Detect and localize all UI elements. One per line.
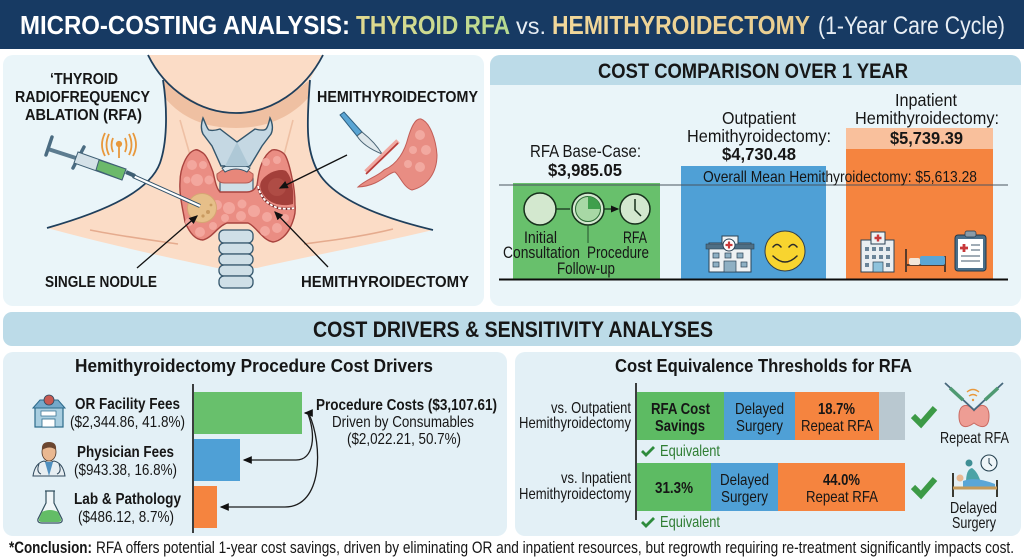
icon: smiley (765, 231, 805, 271)
panel title: Hemithyroidectomy Procedure Cost Drivers (75, 355, 433, 376)
title banner: MICRO-COSTING ANALYSIS: (20, 10, 350, 40)
RFA care pathway: Consultation (503, 244, 580, 262)
label: delayed surgery (950, 500, 997, 532)
stacked bar: outpatient: Surgery (736, 418, 783, 435)
label: thyroid RFA: RADIOFREQUENCY (15, 89, 150, 106)
icon: delayed surgery (953, 455, 997, 497)
chin shadow and neck outline (47, 55, 433, 244)
callout: procedure costs (316, 397, 497, 448)
bar: lab (194, 486, 217, 528)
bar: physician (194, 439, 240, 481)
row label: outpatient (519, 400, 631, 432)
icon: flask (38, 491, 62, 523)
arrow: to resection margin (275, 212, 328, 267)
label: thyroid RFA (15, 71, 150, 124)
label: physician fees (74, 444, 177, 479)
label: delayed surgery: Surgery (952, 515, 996, 532)
label: thyroid RFA: ABLATION (RFA) (25, 107, 142, 124)
RFA care pathway: Initial (524, 229, 557, 247)
icon: radio signal (102, 133, 136, 158)
label: RFA cost (530, 141, 641, 180)
thyroid cartilage (202, 118, 272, 194)
stacked bar: inpatient: 31.3% (655, 480, 693, 497)
stacked bar: outpatient: RFA Cost (651, 401, 711, 418)
neck and chest skin (47, 55, 433, 268)
title banner: THYROID RFA (356, 10, 510, 40)
label: thyroid RFA: ‘THYROID (50, 71, 118, 88)
label: OR facility fees (70, 396, 185, 431)
label: RFA cost: RFA Base-Case: (530, 141, 641, 161)
icon: physician (33, 442, 65, 476)
arrow: to nodule (137, 216, 197, 268)
icon: RFA needle syringe (46, 137, 200, 206)
stacked bar: inpatient: Delayed (720, 472, 769, 489)
label: outpatient cost: Hemithyroidectomy: (687, 126, 831, 146)
label: delayed surgery: Delayed (950, 500, 997, 517)
label: inpatient cost: Inpatient (895, 90, 957, 110)
label: physician fees: ($943.38, 16.8%) (74, 462, 177, 479)
stacked bar: outpatient: Delayed (735, 401, 784, 418)
equivalent flag: inpatient: Equivalent (660, 514, 720, 531)
label: RFA cost: $3,985.05 (548, 160, 622, 180)
icon: scalpel (340, 112, 398, 174)
callout: procedure costs: ($2,022.21, 50.7%) (347, 431, 461, 448)
icon: hospital inpatient (861, 232, 894, 272)
label: OR facility fees: ($2,344.86, 41.8%) (70, 414, 185, 431)
bar: RFA base-case (513, 183, 660, 279)
label: inpatient cost: $5,739.39 (890, 128, 963, 148)
baseline axis (499, 278, 1008, 280)
label: physician fees: Physician Fees (77, 444, 174, 461)
title banner (0, 0, 1024, 49)
title banner: vs. (516, 13, 546, 39)
title banner: HEMITHYROIDECTOMY (552, 10, 810, 40)
label: inpatient cost (855, 90, 999, 148)
icon: hospital bed (906, 249, 945, 272)
removed thyroid lobe (358, 119, 437, 190)
label: lab and pathology: Lab & Pathology (74, 491, 181, 508)
stacked bar: outpatient: Savings (655, 418, 705, 435)
bar: OR facility (194, 392, 302, 434)
panel: cost equivalence thresholds (515, 352, 1021, 536)
stacked bar: inpatient: 44.0% (823, 472, 860, 489)
row label: inpatient: vs. Inpatient (561, 470, 631, 487)
label: lab and pathology: ($486.12, 8.7%) (78, 509, 174, 526)
bar: outpatient (681, 166, 826, 279)
section heading: cost drivers: COST DRIVERS & SENSITIVITY ANALYSES (313, 317, 713, 342)
label: outpatient cost (687, 108, 831, 164)
label: lab and pathology (74, 491, 181, 526)
icon: clipboard (955, 231, 986, 271)
label: single nodule: SINGLE NODULE (45, 274, 157, 291)
section heading: cost drivers (3, 312, 1021, 346)
panel: anatomy illustration (3, 55, 484, 306)
equivalent flag: outpatient: Equivalent (660, 443, 720, 460)
label: inpatient cost: Hemithyroidectomy: (855, 108, 999, 128)
callout: procedure costs: Driven by Consumables (332, 414, 474, 431)
row label: inpatient: Hemithyroidectomy (519, 486, 631, 503)
RFA care pathway (503, 193, 650, 278)
callout: procedure costs: Procedure Costs ($3,107.61) (316, 397, 497, 414)
check mark: inpatient (913, 479, 935, 495)
label: hemithyroidectomy bottom: HEMITHYROIDECTOMY (301, 274, 469, 291)
row label: inpatient (519, 470, 631, 503)
panel heading (490, 55, 1021, 85)
thyroid gland (180, 150, 295, 242)
RFA care pathway: RFA (623, 229, 647, 247)
conclusion text: *Conclusion: (9, 539, 92, 557)
icon: OR building (33, 395, 65, 427)
resected lobe lesion (258, 170, 294, 209)
panel: procedure cost drivers (3, 352, 507, 536)
icon: repeat RFA (945, 383, 1003, 427)
bar: inpatient (846, 128, 993, 279)
arrow: to lesion (280, 155, 347, 188)
stacked bar: inpatient: Surgery (721, 489, 768, 506)
stacked bar: outpatient: Repeat RFA (801, 418, 873, 435)
panel title: Cost Equivalence Thresholds for RFA (615, 355, 912, 376)
mean reference line: Overall Mean Hemithyroidectomy: $5,613.28 (703, 169, 977, 186)
label: outpatient cost: Outpatient (722, 108, 796, 128)
lower trachea (219, 230, 253, 288)
row label: outpatient: vs. Outpatient (551, 400, 631, 417)
row label: outpatient: Hemithyroidectomy (519, 415, 631, 432)
RFA care pathway: Follow-up (557, 260, 615, 278)
stacked bar: outpatient (637, 392, 905, 440)
RFA care pathway: Procedure (587, 244, 649, 262)
label: outpatient cost: $4,730.48 (722, 144, 796, 164)
icon: hospital outpatient (706, 236, 754, 272)
label: OR facility fees: OR Facility Fees (75, 396, 180, 413)
equivalent flag: inpatient (642, 514, 720, 531)
panel heading: COST COMPARISON OVER 1 YEAR (598, 59, 908, 83)
stacked bar: inpatient: Repeat RFA (806, 489, 878, 506)
check mark: outpatient (913, 408, 935, 424)
arrows: procedure cost links (221, 413, 318, 507)
label: hemithyroidectomy top: HEMITHYROIDECTOMY (317, 89, 478, 106)
single nodule (188, 194, 216, 222)
equivalent flag: outpatient (642, 443, 720, 460)
panel: cost comparison (490, 55, 1021, 306)
stacked bar: inpatient (637, 463, 905, 511)
stacked bar: outpatient: 18.7% (818, 401, 855, 418)
